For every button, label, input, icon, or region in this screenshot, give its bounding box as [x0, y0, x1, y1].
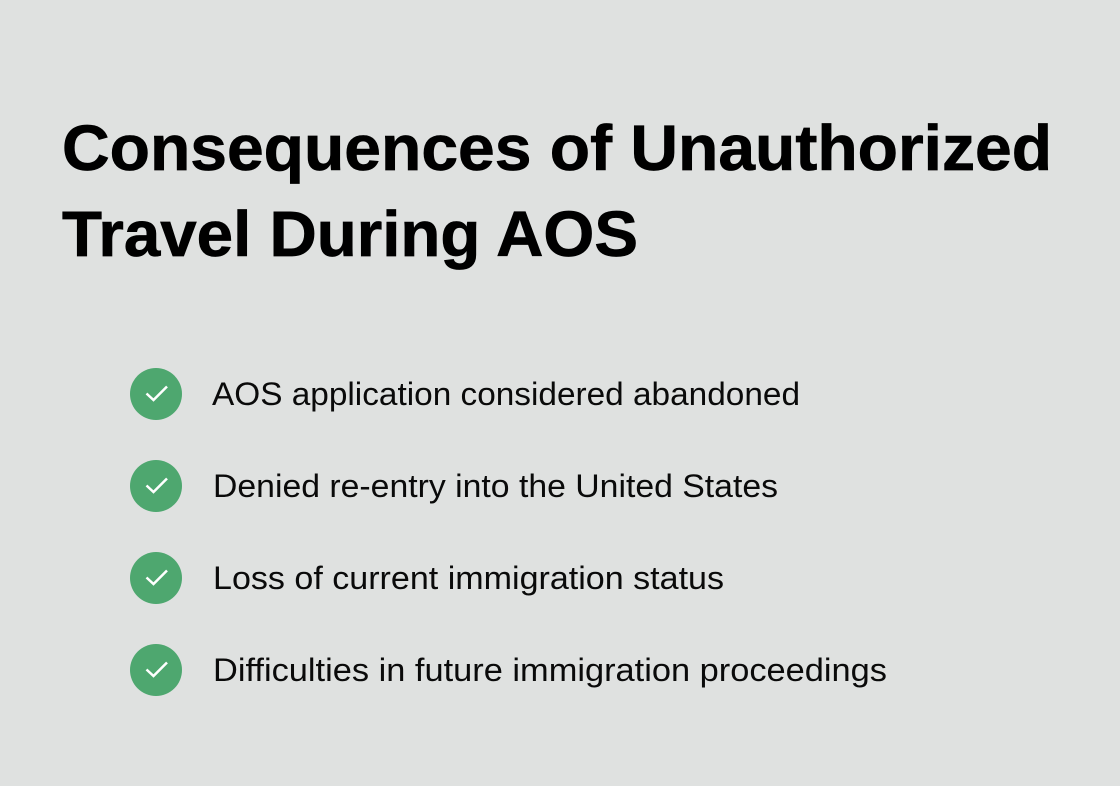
- title: Consequences of Unauthorized: [62, 112, 1052, 184]
- item: loss of status: [130, 552, 724, 604]
- item: future difficulties: [130, 644, 887, 696]
- item: AOS application abandoned: AOS application considered abandoned: [212, 376, 800, 412]
- title: [62, 112, 1052, 270]
- item: denied re-entry: [130, 460, 778, 512]
- item: denied re-entry: Denied re-entry into the United States: [213, 468, 778, 504]
- item: AOS application abandoned: [130, 368, 800, 420]
- checklist: [130, 368, 887, 696]
- item: future difficulties: Difficulties in future immigration proceedings: [213, 652, 887, 688]
- item: loss of status: Loss of current immigration status: [213, 560, 724, 596]
- title: Travel During AOS: [62, 198, 638, 270]
